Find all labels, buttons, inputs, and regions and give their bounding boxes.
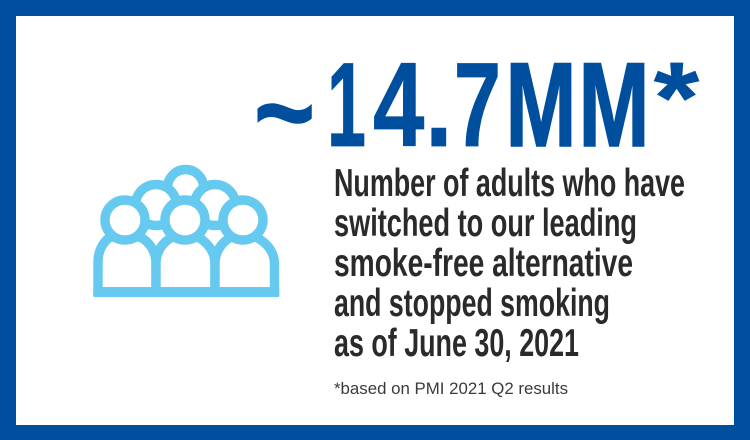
description text: smoke-free alternative — [334, 242, 633, 285]
headline figure — [254, 38, 699, 179]
description text: as of June 30, 2021 — [334, 322, 579, 365]
number: 4 — [373, 38, 425, 172]
number: 7 — [454, 38, 501, 172]
number: M — [578, 38, 650, 172]
number: . — [425, 38, 453, 172]
icon: group of people — [93, 170, 279, 297]
description text: and stopped smoking — [334, 282, 610, 325]
footnote: *based on PMI 2021 Q2 results — [334, 379, 568, 398]
number: 1 — [327, 38, 366, 172]
number: * — [654, 42, 699, 154]
number: M — [506, 38, 576, 172]
number — [327, 38, 699, 172]
tilde: ~ — [254, 45, 315, 179]
description text — [334, 162, 685, 365]
